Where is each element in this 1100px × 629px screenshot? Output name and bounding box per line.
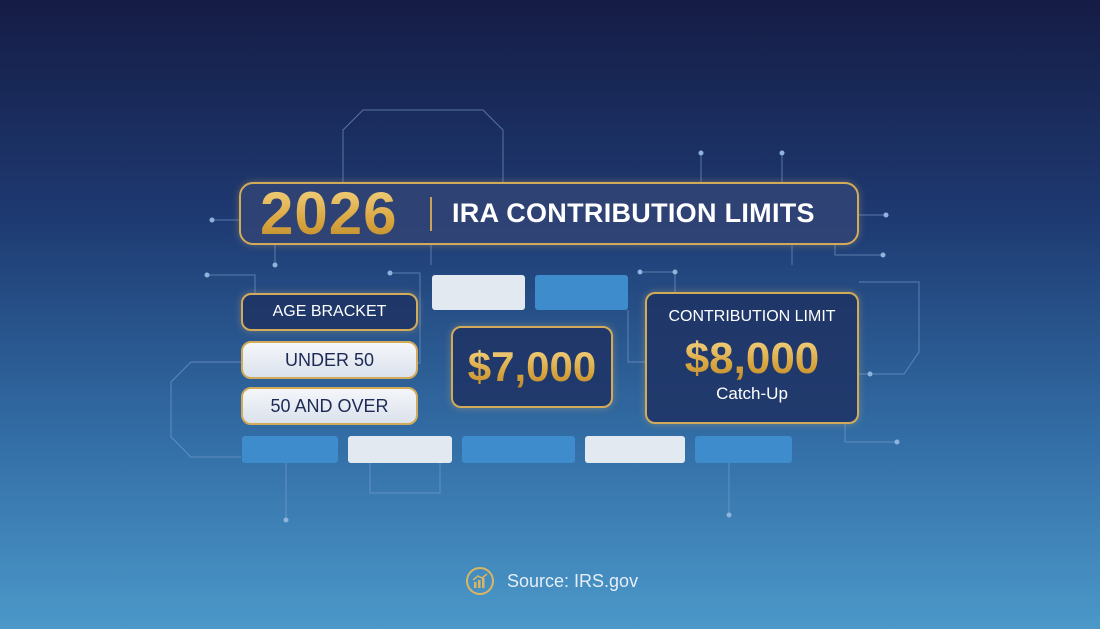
contribution limit box: Catch-Up: [716, 384, 788, 403]
age bracket header: [241, 293, 418, 331]
icon: chart: [466, 567, 494, 595]
bottom blocks: [242, 436, 338, 463]
50 and over: 50 AND OVER: [270, 396, 389, 416]
contribution limit box: [645, 292, 859, 424]
$7,000 box: [451, 326, 613, 408]
under 50: UNDER 50: [285, 350, 374, 370]
50 and over: [241, 387, 418, 425]
contribution limit box: CONTRIBUTION LIMIT: [668, 308, 836, 325]
age bracket header: AGE BRACKET: [273, 303, 386, 320]
title bar: [239, 182, 859, 245]
year: 2026: [260, 180, 397, 247]
heading: IRA CONTRIBUTION LIMITS: [452, 198, 815, 228]
source: [466, 567, 638, 595]
$7,000 box: $7,000: [468, 343, 596, 390]
top blocks: [432, 275, 525, 310]
contribution limit box: $8,000: [685, 334, 819, 383]
under 50: [241, 341, 418, 379]
source: Source: IRS.gov: [507, 570, 638, 590]
